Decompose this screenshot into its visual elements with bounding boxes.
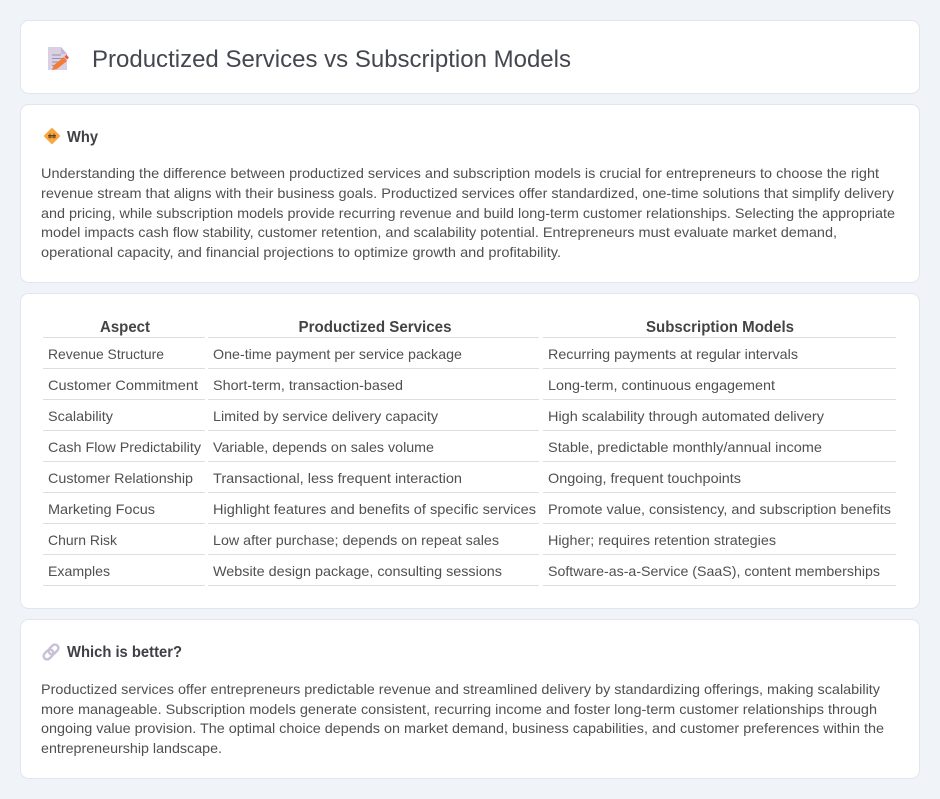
row: examples: [48, 563, 880, 579]
row: customer commitment: Short-term, transaction-based: [213, 377, 403, 393]
icon: warning diamond: [45, 129, 59, 143]
row: customer commitment: Customer Commitment: [48, 377, 198, 393]
text block: why paragraph: model impacts cash flow stability, customer retention, and scalability potential. Entrepreneurs must evaluate market demand,: [41, 224, 837, 240]
row: cash flow predictability: Stable, predictable monthly/annual income: [548, 439, 822, 455]
panel: header: [20, 20, 920, 94]
row: examples: Software-as-a-Service (SaaS), content memberships: [548, 563, 880, 579]
row: churn risk: [48, 532, 776, 548]
icon: memo and pencil: [48, 47, 69, 70]
row: marketing focus: Highlight features and benefits of specific services: [213, 501, 536, 517]
row: revenue structure: One-time payment per service package: [213, 346, 462, 362]
heading: which is better: Which is better?: [67, 644, 182, 661]
row: churn risk: Low after purchase; depends on repeat sales: [213, 532, 499, 548]
panel: which is better: [20, 620, 920, 778]
text block: why paragraph: [41, 165, 895, 260]
heading: why: Why: [67, 129, 98, 146]
row: scalability: Scalability: [48, 408, 113, 424]
row: customer relationship: Ongoing, frequent touchpoints: [548, 470, 741, 486]
row: customer commitment: [48, 377, 775, 393]
table header row: Productized Services: [298, 319, 452, 336]
text block: which is better paragraph: Productized services offer entrepreneurs predictable revenue and streamlined delivery by standardizing offerings, making scalability: [41, 681, 880, 697]
table header row: Subscription Models: [646, 319, 794, 336]
row: customer commitment: Long-term, continuous engagement: [548, 377, 775, 393]
title: Productized Services vs Subscription Models: [92, 46, 571, 73]
text block: why paragraph: and pricing, while subscription models provide recurring revenue and build long-term customer relationships. Selecting the appropriate: [41, 205, 895, 221]
row: revenue structure: [48, 346, 798, 362]
row: scalability: [48, 408, 824, 424]
row: marketing focus: Marketing Focus: [48, 501, 155, 517]
row: churn risk: Churn Risk: [48, 532, 118, 548]
text block: which is better paragraph: [41, 681, 884, 756]
row: cash flow predictability: Variable, depends on sales volume: [213, 439, 434, 455]
row: customer relationship: [48, 470, 741, 486]
panel: why: [20, 104, 920, 282]
row: customer relationship: Transactional, less frequent interaction: [213, 470, 462, 486]
row: revenue structure: Revenue Structure: [48, 346, 164, 362]
row: scalability: Limited by service delivery capacity: [213, 408, 438, 424]
row: churn risk: Higher; requires retention strategies: [548, 532, 776, 548]
text block: which is better paragraph: more manageable. Subscription models generate consistent, recurring income and foster long-term customer relationships through: [41, 701, 877, 717]
table header row: Aspect: [100, 319, 151, 336]
row: marketing focus: Promote value, consistency, and subscription benefits: [548, 501, 891, 517]
icon: link: [42, 643, 60, 661]
row: revenue structure: Recurring payments at regular intervals: [548, 346, 798, 362]
text block: which is better paragraph: entrepreneurship landscape.: [41, 740, 222, 756]
row: marketing focus: [48, 501, 891, 517]
row: customer relationship: Customer Relationship: [48, 470, 193, 486]
text block: why paragraph: revenue stream that aligns with their business goals. Productized services offer standardized, one-time solutions that simplify delivery: [41, 185, 894, 201]
text block: why paragraph: Understanding the difference between productized services and subscription models is crucial for entrepreneurs to choose the right: [41, 165, 879, 181]
row: cash flow predictability: Cash Flow Predictability: [48, 439, 201, 455]
row: cash flow predictability: [48, 439, 822, 455]
text block: why paragraph: operational capacity, and financial projections to optimize growth and profitability.: [41, 244, 561, 260]
row: examples: Website design package, consulting sessions: [213, 563, 502, 579]
row: examples: Examples: [48, 563, 110, 579]
row: scalability: High scalability through automated delivery: [548, 408, 824, 424]
table header row: [100, 319, 794, 336]
text block: which is better paragraph: ongoing value provision. The optimal choice depends on market demand, business capabilities, and customer preferences within the: [41, 720, 884, 736]
panel: comparison table: [20, 294, 920, 608]
